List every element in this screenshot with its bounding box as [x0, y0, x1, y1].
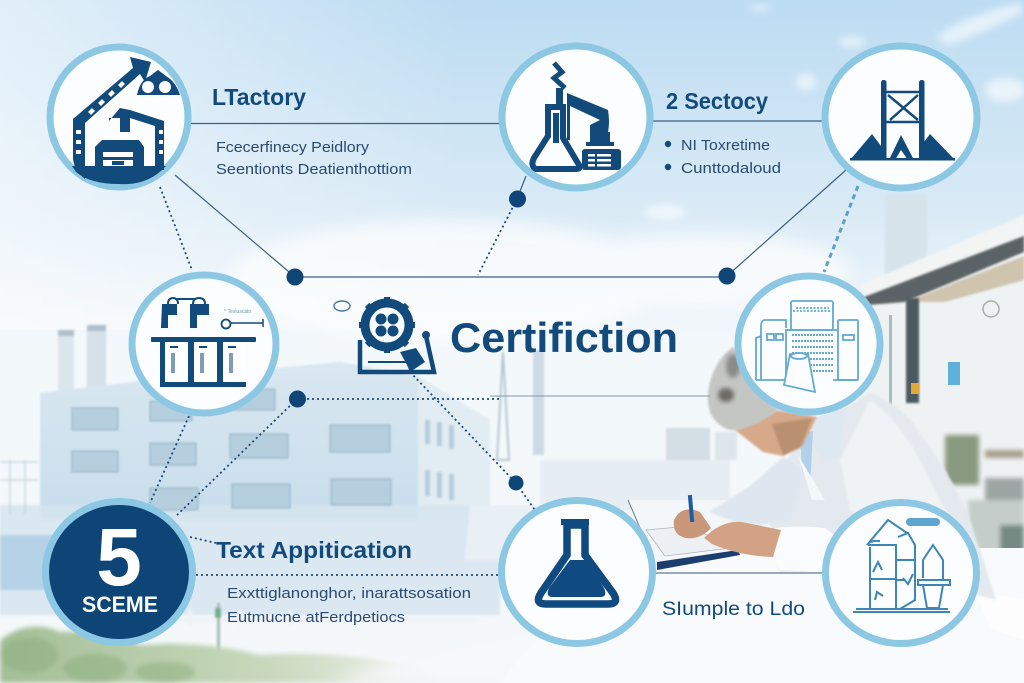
hair	[708, 347, 778, 430]
panel: sample	[502, 500, 805, 644]
icon: flask	[502, 500, 652, 644]
heading: 2 Sectocy: 2 Sectocy	[666, 88, 768, 114]
panel: factory	[50, 47, 412, 187]
icon: tower and mountains	[825, 46, 977, 188]
lab coat back and sleeve	[760, 393, 996, 600]
pen	[688, 495, 694, 522]
icon: small badge	[334, 301, 350, 311]
text block: application details	[227, 585, 471, 626]
heading: LTactory: LTactory	[212, 84, 306, 110]
background: laboratory room	[850, 215, 1024, 620]
icon: flask and machine	[502, 46, 650, 188]
panel: sector	[502, 46, 781, 188]
text block: bulleted list: Cunttodaloud	[681, 160, 781, 177]
left sleeve	[709, 457, 805, 525]
neck and face	[735, 410, 817, 456]
icon: factory with crane arrow	[50, 47, 188, 187]
text block: bulleted list	[665, 137, 781, 177]
resting hand	[704, 522, 781, 557]
icon: building outline	[738, 276, 880, 412]
shirt	[800, 431, 813, 490]
badge: 5 SCEME: 5	[96, 512, 142, 603]
background: trees	[0, 627, 440, 683]
front cuff	[773, 526, 872, 572]
photo: scientist in lab coat writing	[500, 347, 1024, 683]
text block: application details: Eutmucne atFerdpetiocs	[227, 609, 405, 626]
badge: 5 SCEME: SCEME	[82, 592, 158, 617]
text block: application details: Exxttiglanonghor, inarattsosation	[227, 585, 471, 602]
icon: lab equipment outline	[826, 502, 976, 644]
badge: 5 SCEME	[46, 502, 192, 642]
text block: factory details: Seentionts Deatienthottiom	[216, 161, 412, 178]
large paper	[628, 500, 780, 570]
text block: factory details: Fcecerfinecy Peidlory	[216, 139, 370, 156]
desk surface	[500, 548, 1024, 683]
collar	[812, 408, 843, 460]
background: distant towers and city	[497, 195, 927, 510]
connector lines	[175, 121, 846, 573]
icon: workbench with cabinets	[132, 275, 276, 413]
connector nodes	[286, 190, 736, 490]
writing hand	[674, 509, 711, 538]
title text: Certifiction	[450, 314, 678, 361]
text block: factory details	[216, 139, 412, 178]
text: SIumple to Ldo: SIumple to Ldo	[662, 599, 805, 620]
panel: scheme number	[46, 502, 471, 642]
clipboard	[646, 526, 731, 556]
heading: Certifiction with gear icon	[334, 297, 678, 372]
background: factory building	[0, 325, 545, 663]
background: white fade toward desk	[330, 610, 1024, 683]
icon: gear and ribbon	[359, 297, 434, 372]
dashed link: top right to right circle	[824, 186, 858, 272]
heading: Text Appitication: Text Appitication	[216, 537, 412, 563]
text block: bulleted list: NI Toxretime	[681, 137, 770, 154]
icon: workbench with cabinets: ^ Texluscato	[224, 309, 251, 315]
